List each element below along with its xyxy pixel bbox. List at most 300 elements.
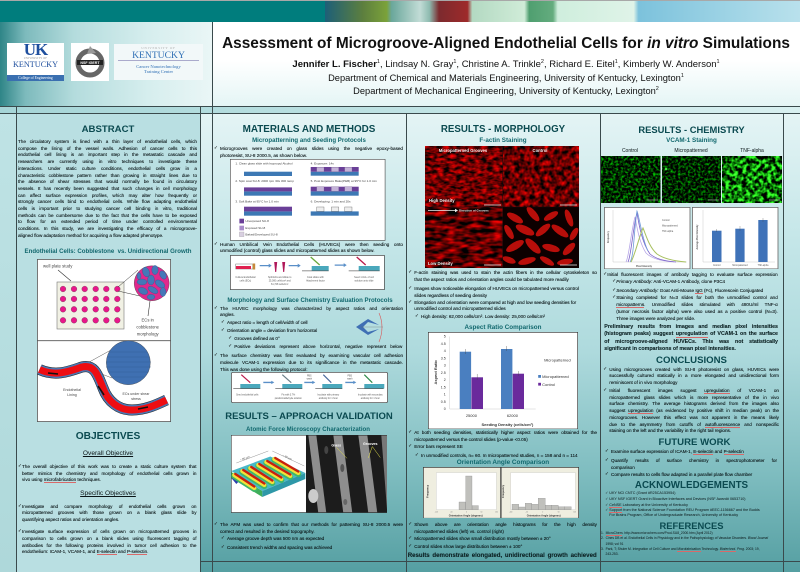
future work two — [611, 457, 777, 471]
acknowledgements list: UKY NCI CNTC (Grant #R25CA153954) — [609, 491, 675, 495]
bar chart: aspect ratio: 2.5 — [441, 371, 446, 375]
orientation bullet one — [408, 522, 597, 534]
panel: results morphology: ✓ — [408, 544, 412, 548]
figure: AFM images: ~ 80 μm — [282, 453, 293, 461]
bar chart: mean pixel intensity — [692, 207, 779, 269]
diagram: staining protocol: wash — [347, 379, 353, 381]
bar chart: mean pixel intensity: Average Pixel Intensity — [696, 224, 699, 249]
diagram: cell seeding workflow: Coat slides with — [307, 276, 325, 279]
HUVEC seeding text: Human Umbilical Vein Endothelial Cells (HUVECs) were then seeding onto — [220, 242, 403, 247]
bar chart: aspect ratio: Control — [542, 382, 555, 387]
abstract text: interactions. Under static culture conditions, endothelial cells grow in a — [18, 166, 197, 171]
abstract text: to flow for an extended period of time under controlled environmental — [18, 219, 197, 224]
histograms: orientation angle: Frequency — [501, 484, 505, 498]
surface chemistry text: The surface chemistry was first evaluated by examining vascular cell adhesion — [220, 353, 403, 358]
conclusion two: microgrooves. However this effect was not apparent in the means likely — [609, 415, 779, 420]
panel: results chemistry — [600, 113, 783, 572]
preliminary results statement: significant in comparisons of mean pixel intensities. — [604, 346, 736, 352]
abstract text: the absence of shear stresses that would normally be found in circulatory — [18, 179, 197, 184]
panel: results chemistry: ✓ — [603, 367, 607, 372]
aspect ratio bullet one — [408, 430, 597, 442]
panel: results chemistry: ✓ — [612, 295, 616, 300]
abstract text: The circulatory system is lined with a thin layer of endothelial cells, which — [18, 139, 197, 144]
diagram: cell seeding workflow: 25,000 cells/cm² and — [269, 279, 292, 282]
histograms: orientation angle: Orientation Angle (degrees) — [527, 513, 561, 517]
primary antibody bullet: Primary Antibody: Anti-VCAM-1 Antibody, clone P3C4 — [616, 279, 725, 284]
panel: results chemistry: ✓ — [603, 272, 607, 277]
figure: AFM images: Grooves — [363, 442, 377, 446]
conclusion two: surface chemistry. The average histograms derived from the images also — [609, 401, 779, 406]
panel: materials and methods — [212, 113, 406, 572]
panel: results chemistry: ✓ — [605, 472, 609, 477]
bar chart: aspect ratio: 1.5 — [441, 385, 446, 389]
diagram: well plate and vessel: well plate study — [43, 263, 73, 268]
bar chart: aspect ratio — [428, 332, 578, 429]
subheading: VCAM-1 staining: VCAM-1 Staining — [666, 137, 717, 144]
histograms: orientation angle: -100 — [435, 511, 438, 513]
preliminary results statement: (histogram peaks) suggest upregulation of VCAM-1 on the surface — [604, 331, 778, 337]
top banner — [0, 0, 800, 22]
diagram: well plate and vessel — [37, 259, 171, 422]
panel: results morphology: ✓ — [408, 300, 412, 305]
acknowledgements list: CeNSE Laboratory at the University of Kentucky — [609, 503, 688, 507]
panel: abstract and objectives: ✓ — [18, 504, 22, 509]
surface chemistry text — [214, 353, 403, 372]
bar chart: aspect ratio: 3.5 — [441, 356, 446, 360]
panel: materials and methods: ✓ — [221, 536, 225, 541]
abstract text: compose the lining of the vessel walls. Adhesion of cancer cells to this — [18, 146, 197, 151]
aspect ratio bullet one: At both seeding densities, statistically higher aspect ratios were obtained for the — [414, 430, 597, 435]
bar chart: aspect ratio: Aspect Ratio — [433, 360, 438, 384]
panel: materials and methods: ✓ — [221, 328, 225, 333]
abstract text: vessels. It has recently been suggested that such changes in cell morphology — [18, 186, 197, 191]
diagram: cell seeding workflow: 61,728 cells/cm² — [271, 283, 289, 286]
bar chart: mean pixel intensity: Control — [713, 264, 721, 267]
bar chart: aspect ratio: Seeding Density (cells/cm²) — [482, 422, 534, 427]
header title block — [212, 22, 800, 106]
panel: materials and methods: ✓ — [228, 336, 232, 341]
acknowledgements list — [609, 491, 779, 519]
bar chart: aspect ratio: 0.5 — [441, 400, 446, 404]
figure: F-actin micrographs: Micropatterned Grooves — [439, 148, 488, 153]
panel: results morphology: ✓ — [408, 286, 412, 291]
heading: approach validation: RESULTS – APPROACH VALIDATION — [225, 411, 393, 422]
diagram: photolithography steps: 3. Soft Bake at 95°C for 1.0 min — [236, 200, 279, 204]
diagram: photolithography steps: Unexposed SU-8 — [246, 219, 269, 223]
histograms: orientation angle — [423, 467, 579, 518]
F-actin bullet two — [408, 286, 579, 298]
F-actin bullet three: Elongation and orientation were compared at high and low seeding densities for — [414, 300, 576, 305]
conclusion two — [609, 388, 779, 435]
header logo band — [0, 22, 212, 106]
F-actin bullet one: F-actin staining was used to stain the actin fibers in the cellular cytoskeleton so — [414, 270, 597, 275]
conclusion two: micropatterned glass slides which is more representative of the in vivo — [609, 395, 779, 400]
results statement: Results demonstrate elongated, unidirectional growth achieved — [408, 552, 597, 559]
header band strip — [0, 106, 800, 113]
bar chart: aspect ratio: Micropatterned — [542, 374, 569, 379]
panel: abstract and objectives — [16, 113, 200, 572]
HUVEC seeding text — [214, 242, 403, 253]
bar chart: aspect ratio: 4 — [444, 349, 446, 353]
line chart: pixel histogram: Pixel Intensity — [636, 265, 653, 268]
diagram: well plate and vessel: cobblestone — [136, 324, 160, 330]
panel: materials and methods: ✓ — [214, 146, 218, 151]
authors: Jennifer L. Fischer1, Lindsay N. Gray1, Christine A. Trinkle2, Richard E. Eitel1, Kimberly W. Anderson1 — [292, 59, 720, 70]
right margin — [783, 113, 800, 572]
diagram: cell seeding workflow: Split ECs and dilute to — [268, 276, 292, 279]
F-actin bullet three — [408, 300, 576, 311]
figure: F-actin micrographs: Direction of Grooves — [459, 208, 489, 212]
logo: University of Kentucky College of Engineering: KENTUCKY — [13, 60, 58, 69]
figure: AFM images: Glass — [331, 443, 341, 447]
panel: results chemistry: ✓ — [605, 449, 609, 454]
panel: results morphology: ✓ — [408, 536, 412, 540]
acknowledgements list: Support from the National Science Foundation REU Program #EEC-1156667 and the Budds — [609, 508, 760, 512]
F-actin bullet two: Images show noticeable elongation of HUVECs on micropatterned versus control — [414, 286, 579, 291]
diagram: well plate and vessel: stress — [131, 397, 141, 401]
panel: results morphology: ✓ — [415, 452, 419, 458]
bar chart: mean pixel intensity: TNF-alpha — [758, 265, 769, 267]
figure: AFM images — [231, 435, 387, 513]
subheading: overall objective: Overall Objective — [83, 450, 133, 457]
diagram: photolithography steps: 6. Developing: 1 min and 20s — [311, 200, 351, 204]
heading: references: REFERENCES — [659, 520, 724, 531]
label: TNF-alpha: TNF-alpha — [740, 148, 764, 154]
panel: results morphology: ✓ — [415, 314, 419, 319]
orientation bullet two: Micropatterned slides show small distribution mostly between ± 20° — [414, 536, 551, 540]
surface chemistry text: molecule VCAM-1 expression due to its significance in the metastatic cascade. — [220, 360, 403, 365]
panel: materials and methods: ✓ — [228, 344, 232, 349]
conclusion two: due to the asymmetry from cutoffs of autofluorescence and nonspecific — [609, 422, 779, 427]
diagram: cell seeding workflow: cells (ECs) — [240, 279, 252, 282]
logo: Cancer Nanotechnology Training Center: Cancer Nanotechnology — [136, 64, 181, 69]
histograms: orientation angle: 50 — [481, 511, 483, 513]
histograms: orientation angle: 50 — [558, 511, 560, 513]
bar chart: aspect ratio: 5 — [444, 334, 446, 338]
subheading: aspect ratio comparison: Aspect Ratio Comparison — [464, 324, 541, 331]
figure: F-actin micrographs: Low Density — [428, 261, 453, 266]
abstract text: researchers are currently using in vitro techniques to investigate these — [18, 159, 197, 164]
figure: F-actin micrographs — [425, 146, 579, 268]
bar chart: aspect ratio: 25000 — [466, 413, 478, 418]
specific objective two: antibodies for the following proteins involved in tumor cell adhesion to the — [22, 542, 196, 548]
preliminary results statement: Preliminary results from images and median pixel intensities — [604, 324, 778, 330]
histograms: orientation angle: 0 — [543, 511, 544, 513]
panel: abstract and objectives: ✓ — [18, 529, 22, 534]
overall objective text — [18, 464, 197, 483]
microgroove text: photoresist, SU-8 2000.5, as shown below. — [220, 152, 307, 158]
future work three: Compare results to cells flow adapted in a parallel plate flow chamber — [611, 472, 752, 477]
trench width bullet: Consistent trench widths and spacing was achieved — [227, 544, 332, 550]
heading: materials and methods: MATERIALS AND METHODS — [243, 124, 375, 135]
specific objective one: quantifying aspect ratios and orientation angles. — [22, 517, 119, 522]
histograms: orientation angle: Orientation Angle (degrees) — [449, 513, 483, 517]
orientation bullet one: Shown above are orientation angle histograms for the high density — [414, 522, 597, 527]
orientation bullet one: micropatterned slides (left) vs. control (right) — [414, 529, 504, 534]
F-actin bullet one — [408, 270, 597, 282]
conclusion one: Using microgrooves created with SU-8 photoresist on glass, HUVECs were — [609, 367, 779, 372]
histograms: orientation angle: 100 — [574, 511, 576, 513]
gutter — [200, 113, 212, 572]
logo: NSF IGERT — [71, 43, 109, 81]
panel: materials and methods: ✓ — [214, 242, 218, 247]
panel: results chemistry: ✓ — [605, 508, 608, 512]
specific objective one: micropatterned grooves with those grown on a blank glass slide by — [22, 510, 196, 515]
VCAM bullet: Initial fluorescent images of antibody tagging to evaluate surface expression — [607, 272, 778, 277]
abstract text: strongly cancer cells bind to endothelial cells. While flow adapting endothelial — [18, 199, 197, 204]
affiliation 1: Department of Chemical and Materials Engineering, University of Kentucky, Lexington1 — [328, 73, 684, 83]
F-actin bullet three: unmodified control and micropatterned slides — [414, 306, 506, 311]
diagram: photolithography steps: 5. Post Exposure Bake(PEB) at 95°C for 1.0 min — [311, 179, 377, 183]
bar chart: aspect ratio: 0 — [444, 407, 446, 411]
affiliation 2: Department of Mechanical Engineering, University of Kentucky, Lexington2 — [353, 86, 659, 96]
staining bullet: Three images were analyzed per slide. — [616, 316, 695, 320]
orientation bullet three: Control slides show large distribution between ± 100° — [414, 544, 522, 548]
diagram: staining protocol: PBS — [347, 376, 352, 378]
staining bullet — [616, 295, 778, 322]
diagram: photolithography steps: Baked/Developed SU-8 — [246, 233, 278, 237]
figure: AFM images: ~ 80 μm — [239, 454, 251, 462]
panel: materials and methods: ✓ — [214, 522, 218, 527]
diagram: photolithography steps: 1. Clean glass slide with Isopropyl Alcohol — [236, 162, 293, 166]
future work two: Quantify results of surface chemistry in spectrophotometer for — [611, 458, 777, 463]
histograms: orientation angle: -50 — [526, 511, 528, 513]
specific objective two: endothelium: ICAM-1, VCAM-1, and E-selectin and P-selectin. — [22, 549, 148, 554]
references list: 1. MicroChem. http://www.microchem.com/Prod-SU8_2000.htm (April 2012) — [601, 530, 713, 534]
aspect ratio bullet: Aspect ratio = length of cell/width of cell — [227, 320, 308, 324]
diagram: staining protocol: Incubate with primary — [317, 394, 340, 397]
subheading: specific objectives: Specific Objectives — [80, 490, 136, 497]
logo: Cancer Nanotechnology Training Center: KENTUCKY — [132, 50, 185, 61]
label: control: Control — [622, 148, 638, 154]
morphology text: The HUVEC morphology was characterized by aspect ratios and orientation — [220, 306, 403, 310]
conclusion one — [609, 367, 779, 387]
morphology text: angles. — [220, 312, 235, 317]
panel: materials and methods: ✓ — [221, 320, 225, 324]
panel: results chemistry: ✓ — [605, 458, 609, 463]
left margin — [0, 113, 16, 572]
panel: results morphology: ✓ — [408, 444, 412, 449]
conclusion one: successfully cultured statically in a more elongated and unidirectional form — [609, 373, 779, 378]
future work two: comparison — [611, 465, 635, 470]
histograms: orientation angle: Frequency — [426, 484, 430, 498]
bar chart: aspect ratio: 3 — [444, 364, 446, 368]
icon: orientation angle cell — [356, 312, 383, 342]
diagram: staining protocol: wash — [306, 379, 312, 381]
panel: results chemistry: ✓ — [612, 288, 616, 292]
diagram: well plate and vessel: ECs under shear — [123, 392, 150, 396]
heading: future work: FUTURE WORK — [659, 437, 730, 448]
specific objective one — [18, 504, 197, 522]
F-actin bullet one: that the aspect ratios and orientation angles could be tabulated more readily — [414, 277, 569, 282]
diagram: photolithography steps: 4. Exposure: 14s — [311, 162, 335, 166]
diagram: staining protocol: PBS — [307, 376, 312, 378]
conclusion two: staining on the left and the variability in the right tail regions. — [609, 428, 731, 433]
diagram: staining protocol: paraformaldehyde solution — [274, 397, 302, 400]
diagram: staining protocol: Fix with 3.7% — [281, 394, 295, 397]
panel: materials and methods: ✓ — [214, 306, 218, 310]
histograms: orientation angle: -100 — [509, 511, 513, 513]
histograms: orientation angle: -50 — [451, 511, 453, 513]
abstract text: endothelial cell lining is an important step in the metastatic cascade and — [18, 152, 197, 157]
panel: results morphology: ✓ — [408, 270, 412, 275]
staining bullet: Staining completed for N=3 slides for both the unmodified control and — [616, 295, 778, 300]
panel: materials and methods: ✓ — [221, 544, 225, 550]
diagram: cell seeding workflow — [230, 255, 385, 290]
line chart: pixel histogram — [604, 207, 690, 269]
subheading: evaluation protocols: Morphology and Surface Chemistry Evaluation Protocols — [227, 297, 393, 304]
aspect ratio bullet one: micropatterned versus the control slides (p-value <0.05) — [414, 437, 528, 442]
diagram: well plate and vessel: morphology — [137, 332, 160, 336]
label: micropatterned: Micropatterned — [674, 148, 708, 154]
specific objective one: Investigate and compare morphology of endothelial cells grown on — [22, 504, 196, 509]
abstract text: cells is important prior to studying cancer cell binding in vitro, traditional — [18, 206, 197, 211]
overall objective text: vivo using microfabrication techniques. — [22, 477, 101, 482]
diagram: cell seeding workflow: Culture Endothelial — [236, 276, 256, 279]
AFM text — [214, 522, 403, 534]
logo: Cancer Nanotechnology Training Center: Training Center — [144, 69, 173, 74]
F-actin bullet two: slides regardless of seeding density — [414, 293, 487, 298]
AFM text: The AFM was used to confirm that our methods for patterning SU-8 2000.5 were — [220, 522, 403, 527]
overall objective text: better mimics the chemistry and morphology of endothelial cells grown in — [22, 470, 196, 476]
abstract text: conditions. In this study, we are investigating the efficacy of a microgroove- — [18, 226, 197, 231]
error bars bullet: Error bars represent SE — [414, 444, 463, 449]
logo: University of Kentucky College of Engineering — [7, 43, 64, 81]
references list: 3. Park, T; Shuler M. Integration of Cell Culture and Microfabrication Technology. Biotechnol. Prog. 2003; 19, — [601, 547, 760, 551]
diagram: well plate and vessel: Lining — [67, 393, 77, 397]
heading: results morphology: RESULTS - MORPHOLOGY — [441, 124, 565, 135]
bar chart: aspect ratio: Micropatterned — [544, 358, 571, 363]
diagram: cell seeding workflow: Attachment factor — [306, 279, 325, 282]
references list: 2. Cines DB et al. Endothelial Cells in Physiology and in the Pathophysiology of Vascular Disorders. Blood Journal — [601, 536, 768, 540]
figure: VCAM-1 fluorescent images — [601, 156, 782, 203]
abstract text: aligned flow adaptation method for acquiring a flow adapted phenotype. — [18, 233, 163, 238]
panel: results chemistry: ✓ — [605, 497, 608, 501]
conclusion two: Initial fluorescent images suggest upregulation of VCAM-1 on — [609, 388, 779, 393]
diagram: staining protocol — [231, 372, 388, 403]
line chart: pixel histogram: Micropatterned — [662, 224, 679, 227]
grooves bullet: Grooves defined as 0° — [234, 336, 280, 341]
diagram: cell seeding workflow: Seed 1.0mL of cell — [354, 276, 375, 279]
abstract text — [18, 139, 198, 238]
staining bullet: micropatterns. Unmodified slides stimulated with 480U/ml TNF-α — [616, 302, 778, 307]
diagram: staining protocol: Incubate with secondary — [358, 394, 383, 397]
bar chart: aspect ratio: 2 — [444, 378, 446, 382]
logo: University of Kentucky College of Engineering: UNIVERSITY OF — [24, 57, 47, 60]
diagram: well plate and vessel: Endothelial — [63, 388, 81, 392]
heading: abstract: ABSTRACT — [82, 124, 134, 135]
surface chemistry text: This was done using the following protocol: — [220, 367, 308, 372]
title: Assessment of Microgroove-Aligned Endothelial Cells for in vitro Simulations — [222, 35, 790, 52]
bar chart: aspect ratio: 4.5 — [441, 342, 446, 346]
panel: results chemistry: ✓ — [605, 491, 608, 495]
orientation angle bullet: Orientation angle = deviation from horizontal — [227, 328, 317, 333]
diagram: well plate and vessel: ECs in — [142, 318, 155, 322]
AFM text: correct and resulted in the desired topography. — [220, 529, 315, 534]
diagram: photolithography steps — [230, 159, 386, 241]
line chart: pixel histogram: TNF-alpha — [662, 230, 674, 233]
specific objective two: comparison to cells grown on a blank slides using fluorescent tagging of — [22, 536, 196, 541]
panel: results morphology: ✓ — [408, 430, 412, 435]
logo: NSF IGERT: NSF IGERT — [80, 61, 100, 65]
panel: results chemistry: ✓ — [605, 503, 608, 507]
specific objective two: Investigate surface expression of cells grown on micropatterned grooves in — [22, 529, 196, 534]
diagram: photolithography steps: 2. Spin coat SU-8: 2000 rpm 30s 300 ramp — [236, 179, 295, 183]
heading: results chemistry: RESULTS - CHEMISTRY — [638, 124, 745, 135]
HUVEC seeding text: unmodified (control) glass slides and micropatterned slides as shown below. — [220, 248, 374, 253]
diagram: cell seeding workflow: solution onto slide — [355, 279, 374, 282]
figure: F-actin micrographs: Control — [533, 148, 547, 153]
staining bullet: (tumor necrosis factor alpha) were also used as a positive control (N=3). — [616, 309, 778, 314]
diagram: staining protocol: Seed endothelial cells — [236, 394, 259, 397]
subheading: atomic force microscopy: Atomic Force Microscopy Characterization — [246, 426, 370, 433]
heading: conclusions: CONCLUSIONS — [656, 355, 727, 366]
microgroove text — [214, 146, 403, 158]
abstract text: characteristic cobblestone pattern rather than growing in straight lines due to — [18, 173, 197, 178]
line chart: pixel histogram: Frequency — [607, 230, 610, 243]
subheading: cobblestone vs unidirectional: Endothelial Cells: Cobblestone vs. Unidirectional Growth — [25, 248, 191, 255]
subheading: micropatterning: Micropatterning and Seeding Protocols — [252, 137, 366, 144]
heading: objectives: OBJECTIVES — [76, 431, 140, 442]
subheading: orientation angle comparison: Orientation Angle Comparison — [457, 459, 549, 466]
histograms: orientation angle: 0 — [466, 511, 467, 513]
deviations bullet: Positive deviations represent above horizontal, negative represent below — [234, 344, 402, 349]
banner photo strip — [325, 1, 800, 22]
preliminary results statement — [604, 324, 778, 354]
references list — [601, 530, 779, 556]
future work one: Examine surface expression of ICAM-1, E-selectin and P-selectin — [611, 449, 744, 454]
heading: acknowledgements: ACKNOWLEDGEMENTS — [635, 480, 748, 491]
abstract text: methods can be cumbersome due to the fact that the cells have to be exposed — [18, 213, 197, 218]
panel: materials and methods: ✓ — [214, 353, 218, 358]
logo: University of Kentucky College of Engineering: College of Engineering — [18, 76, 53, 80]
references list: 1998; vol 91 — [606, 542, 623, 546]
conclusion two: suggest upregulation (as evidenced by positive shift in median peak) on the — [609, 408, 779, 413]
seeding density bullet: High density: 62,000 cells/cm². Low density: 25,000 cells/cm² — [421, 314, 545, 319]
diagram: staining protocol: antibody for 1 hour — [360, 397, 380, 400]
bar chart: mean pixel intensity: Micropatterned — [733, 264, 749, 267]
diagram: photolithography steps: Exposed SU-8 — [246, 226, 266, 230]
diagram: staining protocol: antibody for 1 hour — [318, 397, 338, 400]
panel: abstract and objectives: ✓ — [18, 464, 22, 469]
panel: results morphology: ✓ — [408, 522, 412, 527]
abstract text: can affect surface expression profiles, which may alter how frequently or — [18, 193, 197, 198]
acknowledgements list: For Brains Program, Office of Undergraduate Research, University of Kentucky — [609, 513, 738, 517]
bar chart: aspect ratio: 62000 — [507, 413, 519, 418]
conclusion one: reminiscent of in vivo morphology — [609, 380, 677, 385]
morphology text — [214, 306, 403, 317]
subheading: f-actin staining: F-actin Staining — [479, 137, 527, 144]
specific objective two — [18, 529, 197, 555]
secondary antibody bullet: Secondary Antibody: Goat Anti-Mouse IgG (Fc), Fluorescein Conjugated — [616, 288, 763, 292]
acknowledgements list: UKY NSF IGERT Grant in Bioactive Interfaces and Devices (NSF Award# 0653710) — [609, 497, 746, 501]
references list: 243-253. — [606, 552, 619, 556]
figure: F-actin micrographs: High Density — [429, 198, 455, 203]
sample size bullet: In unmodified controls, n= 60. In micropatterned studies, n = 158 and n = 114 — [421, 452, 578, 458]
preliminary results statement: of microgroove-aligned HUVECs. This was not statistically — [604, 339, 778, 345]
bar chart: aspect ratio: 1 — [444, 393, 446, 397]
microgroove text: Microgrooves were created on glass slides using the negative epoxy-based — [220, 146, 403, 151]
logo: Cancer Nanotechnology Training Center: UNIVERSITY OF — [141, 46, 176, 50]
histograms: orientation angle: 100 — [495, 511, 498, 513]
panel: results morphology — [406, 113, 600, 572]
panel: results chemistry: ✓ — [603, 388, 607, 393]
groove depth bullet: Average groove depth was 500 nm as expected — [227, 536, 324, 541]
panel: results chemistry: ✓ — [612, 279, 616, 284]
overall objective text: The overall objective of this work was to create a static culture system that — [22, 464, 196, 469]
logo: Cancer Nanotechnology Training Center — [114, 44, 203, 80]
line chart: pixel histogram: Control — [662, 219, 670, 222]
